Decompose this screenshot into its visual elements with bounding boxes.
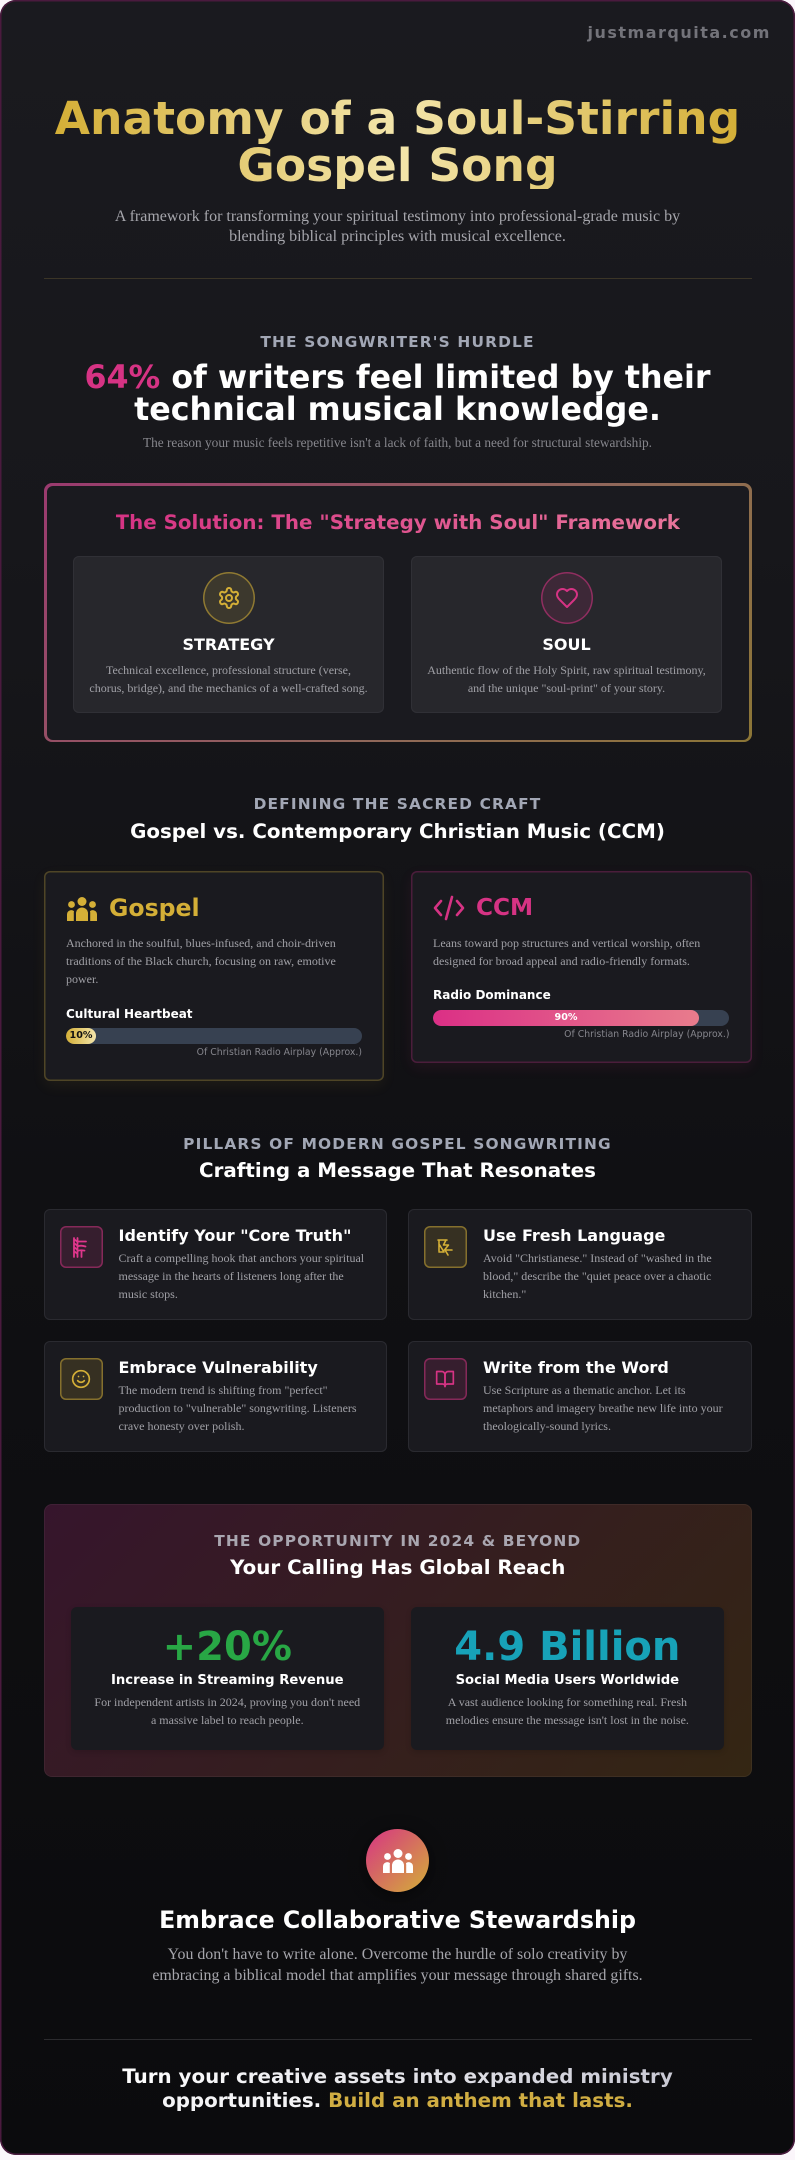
closing call to action: opportunities. Build an anthem that lasts. bbox=[162, 2088, 633, 2112]
pillar: fresh language bbox=[408, 1209, 752, 1320]
closing call to action: Turn your creative assets into expanded ministry bbox=[122, 2065, 673, 2088]
pillar text bbox=[118, 1383, 357, 1433]
pillar text: kitchen." bbox=[483, 1287, 526, 1301]
subtitle bbox=[115, 208, 680, 245]
strategy text bbox=[89, 663, 368, 695]
collaboration text: You don't have to write alone. Overcome the hurdle of solo creativity by bbox=[168, 1946, 627, 1963]
stat text: A vast audience looking for something real. Fresh bbox=[448, 1695, 687, 1709]
supporting sentence: The reason your music feels repetitive isn't a lack of faith, but a need for structural stewardship. bbox=[143, 435, 652, 450]
ccm text: Leans toward pop structures and vertical worship, often bbox=[433, 936, 700, 950]
panel: opportunity bbox=[44, 1504, 752, 1777]
subtitle: blending biblical principles with musical excellence. bbox=[229, 228, 566, 245]
pillar text: message in the hearts of listeners long after the bbox=[118, 1269, 344, 1283]
progress bar: 10% bbox=[66, 1028, 362, 1044]
strategy label: STRATEGY bbox=[182, 635, 275, 654]
pillar heading: Embrace Vulnerability bbox=[118, 1358, 318, 1377]
card: strategy bbox=[73, 556, 384, 713]
section kicker: pillars: PILLARS OF MODERN GOSPEL SONGWRITING bbox=[183, 1134, 612, 1152]
pillar text: theologically-sound lyrics. bbox=[483, 1419, 611, 1433]
panel: strategy with soul framework bbox=[44, 483, 752, 742]
pillar: vulnerability bbox=[44, 1341, 386, 1452]
ccm text: designed for broad appeal and radio-friendly formats. bbox=[433, 954, 690, 968]
strategy text: chorus, bridge), and the mechanics of a well-crafted song. bbox=[89, 681, 368, 695]
pillar text: metaphors and imagery breathe new life into your bbox=[483, 1401, 723, 1415]
progress bar: 90%: 90% bbox=[555, 1012, 577, 1023]
opportunity kicker: THE OPPORTUNITY IN 2024 & BEYOND bbox=[214, 1532, 581, 1550]
icon: collaboration circle bbox=[366, 1829, 429, 1892]
headline statistic: technical musical knowledge. bbox=[134, 392, 661, 428]
pillar heading: Write from the Word bbox=[483, 1358, 669, 1377]
pillar: core truth bbox=[44, 1209, 386, 1320]
section kicker: songwriter's hurdle: THE SONGWRITER'S HURDLE bbox=[260, 332, 535, 350]
icon: people bbox=[67, 897, 97, 921]
pillar text: Avoid "Christianese." Instead of "washed in the bbox=[483, 1251, 712, 1265]
gospel text: power. bbox=[66, 972, 98, 986]
icon: smile bbox=[60, 1358, 102, 1400]
pillar text: music stops. bbox=[118, 1287, 178, 1301]
icon: gear bbox=[202, 572, 254, 624]
bar label: Cultural Heartbeat bbox=[66, 1007, 193, 1021]
pillar: write from the word bbox=[408, 1341, 752, 1452]
title: Gospel Song bbox=[237, 139, 558, 192]
stat label: Increase in Streaming Revenue bbox=[111, 1673, 344, 1688]
gospel text: Anchored in the soulful, blues-infused, and choir-driven bbox=[66, 936, 336, 950]
section kicker: sacred craft: DEFINING THE SACRED CRAFT bbox=[254, 795, 541, 813]
stat text bbox=[94, 1695, 360, 1727]
closing call to action bbox=[122, 2065, 673, 2112]
pillar text bbox=[118, 1251, 364, 1301]
stat text bbox=[446, 1695, 689, 1727]
icon: open book bbox=[424, 1358, 466, 1400]
icon: core truth glyph bbox=[60, 1226, 102, 1268]
site tag: justmarquita.com bbox=[588, 23, 771, 42]
stat card: streaming revenue bbox=[71, 1607, 384, 1750]
stat label: Social Media Users Worldwide bbox=[456, 1673, 679, 1688]
ccm text bbox=[433, 936, 700, 968]
pillar text: The modern trend is shifting from "perfect" bbox=[118, 1383, 328, 1397]
pillar text: Craft a compelling hook that anchors your spiritual bbox=[118, 1251, 364, 1265]
soul text: Authentic flow of the Holy Spirit, raw spiritual testimony, bbox=[427, 663, 706, 677]
pillar text bbox=[483, 1383, 723, 1433]
soul text: and the unique "soul-print" of your story. bbox=[468, 681, 665, 695]
title bbox=[0, 96, 795, 189]
headline statistic bbox=[84, 360, 711, 428]
collaboration text: embracing a biblical model that amplifies your message through shared gifts. bbox=[152, 1967, 643, 1984]
stat value: 4.9 Billion bbox=[454, 1624, 680, 1670]
icon: fresh language glyph bbox=[424, 1226, 466, 1268]
pillar heading: Identify Your "Core Truth" bbox=[118, 1226, 351, 1245]
card: soul bbox=[411, 556, 722, 713]
headline statistic: 64% of writers feel limited by their bbox=[84, 360, 711, 396]
gospel text bbox=[66, 936, 336, 986]
stat text: melodies ensure the message isn't lost in the noise. bbox=[446, 1713, 689, 1727]
gospel heading: Gospel bbox=[109, 894, 200, 922]
section heading: crafting a message: Crafting a Message That Resonates bbox=[199, 1159, 596, 1182]
stat text: For independent artists in 2024, proving you don't need bbox=[94, 1695, 360, 1709]
strategy text: Technical excellence, professional structure (verse, bbox=[106, 663, 351, 677]
pillar text: crave honesty over polish. bbox=[118, 1419, 244, 1433]
stat text: a massive label to reach people. bbox=[151, 1713, 304, 1727]
soul label: SOUL bbox=[542, 635, 591, 654]
progress bar: 10%: 10% bbox=[70, 1030, 92, 1041]
gospel text: traditions of the Black church, focusing on raw, emotive bbox=[66, 954, 336, 968]
pillar text: Use Scripture as a thematic anchor. Let its bbox=[483, 1383, 686, 1397]
framework heading: The Solution: The "Strategy with Soul" Framework bbox=[116, 511, 680, 534]
ccm heading: CCM bbox=[476, 894, 533, 921]
bar label: Radio Dominance bbox=[433, 988, 551, 1002]
title: Anatomy of a Soul-Stirring bbox=[55, 92, 740, 145]
bar caption: Of Christian Radio Airplay (Approx.) bbox=[197, 1047, 362, 1058]
panel: ccm bbox=[411, 871, 752, 1063]
pillar text bbox=[483, 1251, 712, 1301]
icon: code bbox=[434, 896, 464, 920]
bar caption: Of Christian Radio Airplay (Approx.) bbox=[564, 1029, 730, 1040]
collaboration text bbox=[152, 1946, 643, 1984]
collaboration heading: Embrace Collaborative Stewardship bbox=[159, 1906, 636, 1934]
pillar heading: Use Fresh Language bbox=[483, 1226, 665, 1245]
panel: gospel bbox=[44, 871, 384, 1081]
soul text bbox=[427, 663, 706, 695]
pillar text: blood," describe the "quiet peace over a chaotic bbox=[483, 1269, 711, 1283]
section heading: gospel vs ccm: Gospel vs. Contemporary Christian Music (CCM) bbox=[130, 820, 665, 843]
pillar text: production to "vulnerable" songwriting. Listeners bbox=[118, 1401, 357, 1415]
subtitle: A framework for transforming your spiritual testimony into professional-grade music by bbox=[115, 208, 680, 224]
progress bar: 90% bbox=[433, 1010, 729, 1026]
icon: heart bbox=[540, 572, 592, 624]
opportunity heading: Your Calling Has Global Reach bbox=[230, 1556, 565, 1579]
stat card: social media users bbox=[411, 1607, 724, 1750]
stat value: +20% bbox=[163, 1624, 292, 1670]
